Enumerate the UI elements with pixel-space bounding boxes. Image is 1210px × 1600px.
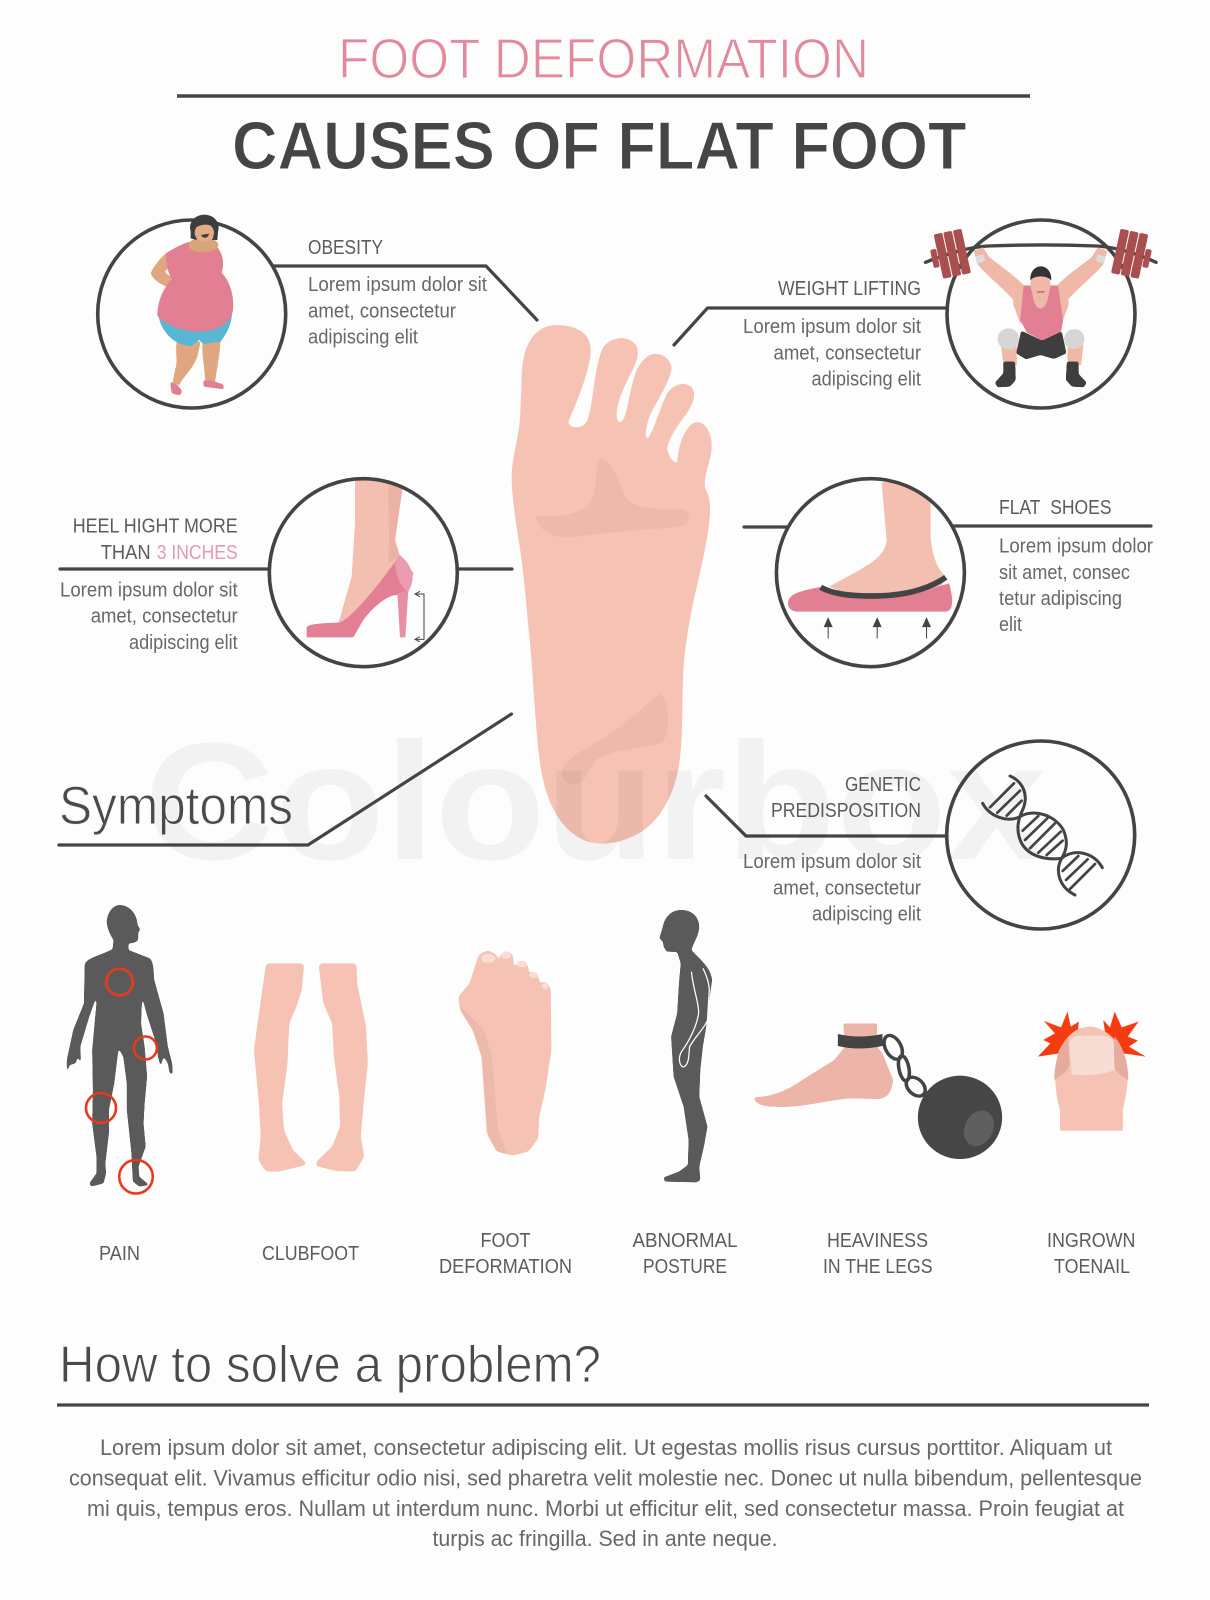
paragraph: Lorem ipsum dolor sit amet, consectetur adipiscing elit. Ut egestas mollis risus cursus porttitor. Aliquam ut: [100, 1435, 1112, 1460]
description: weight lifting: amet, consectetur: [774, 342, 921, 364]
description: weight lifting: Lorem ipsum dolor sit: [743, 316, 921, 338]
label: flat shoes: FLAT SHOES: [999, 497, 1112, 519]
panel: weight lifting: [674, 220, 1156, 408]
description: genetic predisposition: Lorem ipsum dolor sit: [743, 851, 921, 873]
label: foot deformation: FOOT: [480, 1230, 530, 1252]
paragraph: turpis ac fringilla. Sed in ante neque.: [432, 1526, 778, 1551]
section: how to solve a problem: [57, 1336, 1149, 1551]
description: flat shoes: tetur adipiscing: [999, 588, 1122, 610]
label: heel height: HEEL HIGHT MORE: [73, 516, 238, 538]
description: flat shoes: elit: [999, 614, 1022, 636]
description: weight lifting: [743, 316, 921, 390]
description: obesity: Lorem ipsum dolor sit: [308, 274, 487, 296]
icon: high heel shoe: [307, 480, 424, 642]
flat shoes circle: [776, 479, 964, 667]
icon: obese woman: [151, 215, 233, 396]
label: heaviness in the legs: IN THE LEGS: [823, 1256, 932, 1278]
heading: foot deformation: FOOT DEFORMATION: [338, 27, 869, 91]
obesity circle: [98, 220, 286, 408]
label: obesity: OBESITY: [308, 237, 383, 259]
label: heaviness in the legs: [823, 1230, 932, 1278]
description: obesity: amet, consectetur: [308, 300, 456, 322]
symptom: clubfoot: [254, 963, 368, 1265]
symptom: ingrown toenail: [1038, 1012, 1146, 1278]
label: abnormal posture: ABNORMAL: [632, 1230, 738, 1252]
description: weight lifting: adipiscing elit: [812, 368, 921, 390]
label: ingrown toenail: INGROWN: [1047, 1230, 1136, 1252]
watermark: Colourbox: [144, 709, 1047, 895]
label: genetic predisposition: PREDISPOSITION: [771, 800, 921, 822]
symptom: abnormal posture: [632, 910, 738, 1278]
description: flat shoes: Lorem ipsum dolor: [999, 536, 1153, 558]
connector line: [60, 567, 512, 571]
description: flat shoes: [999, 536, 1153, 636]
description: obesity: [308, 274, 487, 348]
heading: symptoms: Symptoms: [59, 776, 293, 836]
connector lines: [744, 526, 1151, 527]
icon: bowed legs: [254, 963, 368, 1172]
heel circle fill: [269, 479, 457, 667]
description: flat shoes: sit amet, consec: [999, 562, 1130, 584]
heel circle: [269, 479, 457, 667]
panel: flat shoes: [744, 479, 1153, 667]
symptom: heaviness in the legs: [754, 1023, 1002, 1278]
weight lifting circle: [947, 220, 1135, 408]
icon: flat shoe: [788, 481, 952, 638]
flat shoes circle fill: [776, 479, 964, 667]
label: ingrown toenail: TOENAIL: [1054, 1256, 1130, 1278]
symptom: foot deformation: [439, 950, 572, 1278]
icon: body silhouette with pain points: [67, 905, 173, 1193]
title block: [177, 27, 1030, 184]
panel: obesity: [98, 215, 537, 408]
label: clubfoot: CLUBFOOT: [262, 1243, 359, 1265]
description: heel height: [60, 580, 238, 654]
label: weight lifting: WEIGHT LIFTING: [778, 278, 921, 300]
icon: dna helix: [983, 776, 1102, 895]
icon: side silhouette: [659, 910, 712, 1182]
label: ingrown toenail: [1047, 1230, 1136, 1278]
paragraph: [69, 1435, 1142, 1551]
panel: genetic predisposition: [706, 741, 1135, 929]
panel: heel height: [60, 479, 512, 667]
central foot illustration: [512, 325, 712, 844]
label: foot deformation: DEFORMATION: [439, 1256, 572, 1278]
icon: toe with pain bursts: [1038, 1012, 1146, 1131]
label: heel height: THAN: [101, 542, 151, 564]
label: genetic predisposition: GENETIC: [845, 774, 921, 796]
label: genetic predisposition: [771, 774, 921, 822]
label: heel height: 3 INCHES: [157, 542, 238, 564]
icon: weightlifter: [926, 229, 1156, 387]
description: heel height: Lorem ipsum dolor sit: [60, 580, 238, 602]
heading: how to solve: How to solve a problem?: [59, 1336, 601, 1394]
description: heel height: amet, consectetur: [91, 606, 238, 628]
icon: foot with ball and chain: [754, 1023, 1002, 1159]
label: heel height: [73, 516, 238, 564]
label: abnormal posture: POSTURE: [643, 1256, 727, 1278]
connector line: [674, 308, 947, 345]
heading: causes of flat foot: CAUSES OF FLAT FOOT: [232, 108, 966, 184]
description: obesity: adipiscing elit: [308, 326, 418, 348]
label: pain: PAIN: [99, 1243, 140, 1265]
connector line: [273, 266, 537, 320]
description: genetic predisposition: amet, consectetur: [773, 878, 921, 900]
label: abnormal posture: [632, 1230, 738, 1278]
symptom: pain: [67, 905, 173, 1265]
description: genetic predisposition: adipiscing elit: [812, 904, 921, 926]
heading: symptoms: [59, 714, 512, 845]
genetic circle: [947, 741, 1135, 929]
label: heaviness in the legs: HEAVINESS: [827, 1230, 928, 1252]
description: genetic predisposition: [743, 851, 921, 926]
connector line: [706, 796, 947, 836]
label: foot deformation: [439, 1230, 572, 1278]
paragraph: mi quis, tempus eros. Nullam ut interdum nunc. Morbi ut efficitur elit, sed consectetur massa. Proin feugiat at: [87, 1496, 1124, 1521]
paragraph: consequat elit. Vivamus efficitur odio nisi, sed pharetra velit molestie nec. Donec ut nulla bibendum, pellentesque: [69, 1466, 1142, 1490]
description: heel height: adipiscing elit: [129, 632, 238, 654]
icon: deformed foot: [458, 950, 551, 1156]
